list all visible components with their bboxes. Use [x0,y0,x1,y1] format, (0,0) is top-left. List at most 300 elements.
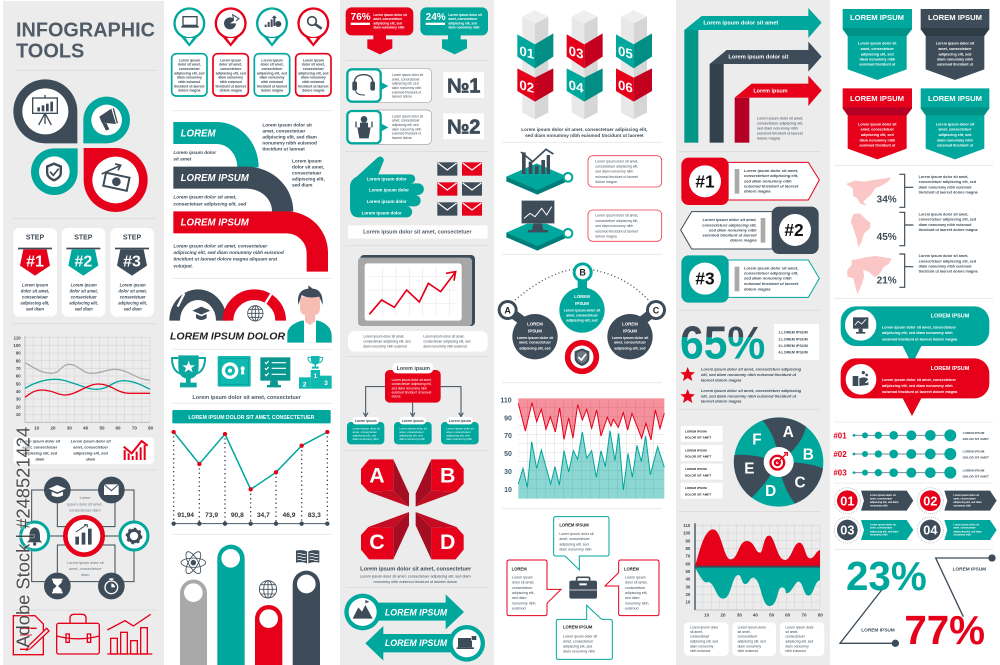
ribbon text blocks: Lorem ipsum dolor sit [262,123,312,129]
map stat: 45 percent: diam nonummy nibh euismod [919,223,972,227]
text box 1: dolore magna [178,89,201,93]
step 3 card [110,228,154,317]
wheel labels: LOREM IPSUM [685,486,707,490]
step 1 card: dolor sit amet, [21,289,49,294]
panel: chart notes: diam nonummy [738,644,761,648]
bubble: bottom: Lorem ipsum dolor sit [563,634,597,638]
card: speaker: Lorem ipsum dolor sit [392,114,423,118]
bubble: bottom: LOREM IPSUM [563,625,593,630]
flow: red box [385,363,441,403]
pin: pie chart [215,7,247,47]
bubble: left: euismod [512,606,526,610]
ribbon text blocks: volutpat. [173,263,193,269]
arrow: dark bent: Lorem ipsum dolor sit [728,55,788,61]
ribbon: teal [173,122,259,167]
panel: column 5 background [676,0,830,665]
big stat: 23 percent with leader: 23% [846,553,927,599]
panel: chart caption: adipiscing elit, sed [23,452,58,456]
title: TOOLS [16,40,84,62]
callout: 24 percent: 24% [426,12,446,23]
line chart: three curves: 50 [99,425,105,430]
speech panel: red [841,358,989,416]
arrow: teal bent: Lorem ipsum dolor sit amet [703,21,778,27]
flow: teal boxes: diam nonummy nibh [353,437,379,441]
icon: trophy [172,355,205,387]
text box 4: dolor sit amet, [302,63,325,67]
bubble: left: sed diam [512,596,527,600]
panel: four map pins [173,7,329,47]
pillars caption: Lorem ipsum dolor sit amet, consectetuer adipiscing elit, [521,127,647,132]
chart: mirrored area [683,523,823,618]
text box 3 [254,54,290,96]
list: lorem ipsum items: 1.LOREM IPSUM [778,330,808,334]
card: speaker: laoreet dolore [392,136,412,140]
ribbon text blocks: adipiscing elit, [292,177,325,183]
numbered arrow: 01: 01 [840,494,854,508]
bubble: right: dolor sit amet, [625,581,647,585]
line chart: three curves: 90 [16,351,21,356]
icon: podium [299,356,332,389]
step 1 card: consectetuer [22,295,48,300]
text box 3: nibh euismod [261,80,283,84]
ribbon text blocks: nonummy nibh euismod [262,141,317,147]
icon: presentation board [13,79,77,143]
icon: teal hand with text [350,157,424,217]
bubble: right: nonummy nibh [625,601,648,605]
speech panel: teal: LOREM IPSUM [931,314,970,320]
panel: chart notes: nibh euismod [738,649,758,653]
icon: megaphone [83,97,130,143]
text box 4: nibh euismod [302,80,324,84]
star note 2: Lorem ipsum dolor sit amet, consectetuer adipiscing [701,388,802,393]
icon: teal hand with text: Lorem ipsum dolor [362,211,402,216]
icon: shield [31,148,78,195]
text band under tablet: consectetuer adipiscing elit, sed [363,339,411,343]
chart: red and teal area: 10 [504,487,512,494]
dot row: 03: LOREM IPSUM [963,468,985,472]
star note 1 [680,367,802,382]
chart: mirrored area: 60 [686,561,691,566]
icon: teal hand with text: Lorem ipsum dolor [367,176,407,181]
map stat: 34 percent: consectetuer adipiscing elit, sed [919,180,977,184]
numbered arrow: 02: nonummy nibh [953,504,971,507]
map stat: 21 percent: tincidunt ut laoreet dolore magna [919,270,978,274]
node A: A [504,305,511,315]
icon: safe [218,356,251,387]
card: speaker: euismod tincidunt ut [392,132,421,136]
node B: LOREM [574,294,590,299]
diagram: speech bubbles around briefcase [507,517,659,659]
node: stopwatch [98,573,125,599]
icon: globe [248,306,263,321]
bar: red [255,605,282,665]
node A: IPSUM [528,329,542,334]
dot row: 01: #01 [833,431,847,440]
diagram: A B C D blocks [361,459,464,559]
network text: ipsum dolor sit amet, [67,502,103,506]
chart: dotted line with values [171,430,329,526]
text box 3: consectetuer [261,67,283,71]
node C [607,300,666,359]
bubble: left: adipiscing elit, [512,591,534,595]
bubble: left: consectetuer [512,586,533,590]
banner: red left [843,88,912,159]
text box 1: nibh euismod [178,80,200,84]
line chart: three curves: 100 [13,343,21,348]
banner: line chart title [172,410,331,423]
node C: IPSUM [623,329,637,334]
tag: number 2: #2 [784,220,804,240]
banner: teal left: amet, consectetuer [861,47,895,51]
bubble: right: adipiscing elit, [625,591,647,595]
callout: 76 percent [346,7,413,54]
chart: mirrored area: 60 [785,613,791,618]
bubble: right: consectetuer [625,586,646,590]
node C: Lorem ipsum dolor sit [612,336,649,340]
text box 3: dolore magna [261,89,283,93]
icon group: envelopes [437,162,482,216]
flow: red box: dolore [392,395,401,399]
flow: teal boxes: Lorem ipsum dolor sit [353,427,380,431]
text box: monitor platform [588,210,662,241]
panel: chart caption [13,437,154,464]
numbered arrow: 02: Lorem ipsum dolor sit [953,494,979,497]
text box 4 [296,54,331,96]
banner: dark right [921,9,989,80]
bubble: left [507,560,561,616]
card: speaker: diam nonummy nibh [392,127,421,131]
banner: teal right: amet, consectetuer [938,128,972,132]
text box: chart platform [588,156,662,187]
ribbon labels: LOREM IPSUM [181,173,250,184]
network text [67,496,105,577]
chart: mirrored area: 10 [704,613,710,618]
step 3 card: consectetuer [120,295,146,300]
text band under tablet: diam nonummy nibh euismod [363,344,407,348]
bubble: left: nonummy nibh [512,601,535,605]
line chart: three curves: 30 [16,397,21,402]
numbered arrow: 03: 03 [840,524,854,538]
icon: graduation cap [192,307,210,320]
arrow: red bent: Lorem ipsum [753,89,788,95]
ribbon text blocks: tincidunt ut laoreet dolore magna aliquam erat [173,257,278,263]
text box 1: Lorem ipsum [179,58,200,62]
line chart: three curves: 50 [16,381,21,386]
text band under tablet: Lorem ipsum dolor sit amet, [423,334,464,338]
platform: monitor on isometric base [506,201,572,251]
text box 3: tincidunt ut laoreet [257,84,288,88]
wheel labels: LOREM IPSUM [685,429,707,433]
banner: red left: euismod tincidunt ut [859,143,896,147]
callout: 76 percent: 76% [351,12,371,23]
bubble: top: LOREM IPSUM [559,523,589,528]
map stat: 21 percent: consectetuer adipiscing elit, sed [919,259,977,263]
bubble: bottom: amet, consectetuer [563,639,594,643]
wheel labels: LOREM IPSUM [685,448,707,452]
card: headset: euismod tincidunt ut [392,90,421,94]
text band under tablet: consectetuer adipiscing elit, sed [423,339,471,343]
numbered arrow: 03: Lorem ipsum dolor sit [870,523,896,526]
flow: red box: Lorem ipsum [397,366,430,372]
numbered arrow: 01 [834,488,913,514]
step 1 card: STEP [26,234,44,241]
tag: number 3: dolore magna [744,286,771,291]
icon: red briefcase [57,614,99,654]
panel: four petal icons [13,79,148,212]
chart: mirrored area: 30 [686,584,691,589]
chart: mirrored area: 80 [686,546,691,551]
chart: mirrored area: 80 [818,613,823,618]
panel: chart notes: adipiscing elit, sed [738,640,766,644]
network text: Lorem [80,496,90,500]
tag: number 3: sed diam nonummy nibh [744,276,792,281]
dot row: 02: #02 [833,450,847,459]
step 2 card: consectetuer [71,295,97,300]
icon: teal hand with text: Lorem ipsum dolor [367,199,407,204]
flow: red box: Lorem ipsum dolor sit amet, [392,378,432,382]
speech panel: red: euismod tincidunt ut laoreet dolore magna [882,390,958,394]
icon caption: Lorem ipsum dolor sit amet, consectetuer [192,395,302,401]
ribbon text blocks: amet, consectetuer [262,129,306,135]
chart: swirl wheel A-F: E [744,461,754,478]
numbered arrow: 04: 04 [923,524,937,538]
band: hand caption: Lorem ipsum dolor sit amet, consectetuer [363,230,472,236]
panel: chart notes: diam nonummy [690,644,714,648]
diagram: A B C circles [498,262,666,371]
ribbon labels: LOREM IPSUM [181,218,250,229]
blocks caption: Lorem ipsum dolor sit amet, consectetuer adipiscing elit, sed diam [360,575,471,579]
panel: chart notes: Lorem ipsum dolor [785,625,815,629]
icon: book [296,550,319,563]
bubble: top: diam nonummy nibh [559,547,592,551]
wheel labels: LOREM IPSUM [685,467,707,471]
chart: mirrored area: 20 [686,592,691,597]
bubble: top: Lorem ipsum dolor sit [559,532,594,536]
bubble: bottom: diam nonummy nibh [563,650,595,654]
bar: dark [293,571,320,665]
ribbon text blocks [173,123,325,269]
panel: chart caption: amet, consectetuer [23,446,58,450]
text band under tablet: diam nonummy nibh euismod [423,344,467,348]
ribbon text blocks: tincidunt ut laoreet [262,147,305,153]
pin: magnifier [297,7,329,47]
ribbon text blocks: Lorem ipsum dolor sit amet, [173,195,237,201]
tag: number 2: consectetuer adipiscing elit, [702,222,757,227]
tag: number 3: euismod tincidunt ut laoreet [744,281,799,286]
numbered arrow: 01: amet, consectetuer [870,497,892,500]
heading: lorem ipsum dolor: LOREM IPSUM DOLOR [170,330,285,342]
pin: laptop [173,7,205,47]
chart: mirrored area: 30 [737,613,742,618]
text box 1 [172,54,207,96]
flow: teal boxes: Lorem ipsum dolor sit [446,427,474,431]
tag: number 3: #3 [695,269,715,289]
text box: monitor platform: sed diam nonummy nibh [595,224,633,228]
wheel labels: DOLOR SIT AMET [685,492,711,496]
title [16,20,155,62]
banner: dark right: adipiscing elit, sed [939,52,971,56]
line chart: three curves: 10 [34,425,40,430]
line chart: three curves: 30 [67,425,72,430]
step 2 card: STEP [74,234,93,241]
band: hand caption [348,225,488,239]
panel: chart notes [684,622,824,656]
line chart: three curves: 40 [83,425,89,430]
panel: chart notes: nibh euismod [785,649,806,653]
map stat: 21 percent: diam nonummy nibh euismod [919,264,972,268]
text box 2: diam nonummy [218,76,243,80]
icon: podium: 1 [313,373,317,380]
chart: dotted line with values: 91,94 [177,512,194,519]
banner: teal left: euismod tincidunt ut [859,63,896,67]
text box 2: dolore magna [220,89,242,93]
chart: red and teal area: 90 [504,415,512,422]
bubble: left: LOREM [512,567,527,572]
panel: chart notes: nibh euismod [690,649,710,653]
map stat: 45 percent: Lorem ipsum dolor sit amet, [919,213,968,217]
panel: chart caption: diam [86,458,96,462]
tag: number 1: sed diam nonummy nibh [744,178,792,183]
banner: teal left: diam nonummy nibh [859,58,895,62]
banner: teal right: LOREM IPSUM [928,94,982,103]
line chart: three curves: 110 [14,335,21,340]
pillars: 05 and 06: 05 [618,43,633,62]
chart: dotted line with values: 90,8 [231,512,244,519]
step 3 card: sed diam [124,307,142,312]
node A: LOREM [527,322,543,327]
block C: C [369,530,385,554]
map stat: 34 percent [846,174,978,207]
bar: teal [217,545,245,665]
node B: Lorem ipsum dolor sit [564,308,601,312]
line chart: three curves: 80 [148,425,154,430]
text: arrows note: euismod tincidunt ut laoreet [757,131,804,135]
text box 1: adipiscing elit, sed [174,71,204,75]
icon: red growth chart [107,614,152,654]
node: hourglass [44,573,71,599]
step 2 card: sed diam [75,307,93,312]
wheel labels: DOLOR SIT AMET [685,473,711,477]
step 2 card [62,228,105,317]
dot row: 03 [833,467,989,479]
arrow: teal bent [684,8,822,143]
chart: mirrored area: 70 [686,554,691,559]
panel: column 3 background [340,0,494,665]
step 3 card: STEP [123,234,141,241]
callout: 24 percent: diam nonummy nibh [448,26,480,30]
chart: red and teal area: 110 [500,397,512,404]
icon: atom [181,550,206,576]
text box: chart platform: Lorem ipsum dolor sit amet, [595,159,638,163]
node B: B [579,268,586,278]
banner: teal left: adipiscing elit, sed [861,52,894,56]
speech panel: red: LOREM IPSUM [931,366,970,372]
text box 2: adipiscing elit, sed [216,71,246,75]
chart: mirrored area: 20 [720,613,726,618]
map stat: 45 percent: consectetuer adipiscing elit, sed [919,218,977,222]
numbered arrow: 04: amet, consectetuer [953,527,976,530]
bubble: top [554,517,609,570]
arrow: right with mountain: LOREM IPSUM [385,607,448,617]
numbered arrow: 01: nonummy nibh [870,504,888,507]
flow: teal boxes: Lorem ipsum [449,419,471,423]
ribbon text blocks: Lorem ipsum [292,159,322,165]
numbered arrow: 03 [834,517,913,543]
bubble: right: LOREM [624,567,640,572]
bubble: left: Lorem ipsum [512,576,533,580]
ribbon text blocks: consectetuer [292,171,322,177]
ribbon text blocks: Lorem ipsum dolor sit amet, consectetuer [173,243,268,249]
bubble: bottom: adipiscing elit, sed [563,645,592,649]
tag: number 2: sed diam nonummy nibh [709,227,757,232]
banner: teal right: euismod tincidunt ut [937,143,974,147]
tag: number 1: #1 [695,171,715,191]
chart: swirl wheel A-F: A [783,424,794,441]
star note 1: Lorem ipsum dolor sit amet, consectetuer adipiscing [701,367,802,372]
speech panel: red: Lorem ipsum dolor sit amet, consectetuer [882,378,957,382]
panel: chart caption: amet, consectetuer [73,446,109,450]
card: speaker: amet, consectetuer [392,119,421,123]
flow: teal boxes: amet, consectetuer [446,430,471,434]
chart: dotted line with values: 46,9 [283,512,296,519]
text box 3: dolor sit amet, [260,63,284,67]
bubble: right: Lorem ipsum [625,576,646,580]
pillars: 05 and 06: 06 [618,77,633,96]
chart: mirrored area: 70 [801,613,807,618]
text box: monitor platform: dolore magna [595,234,617,238]
ribbon text blocks: adipiscing elit, sed diam nonummy nibh euismod [173,250,284,256]
icon: podium: 3 [324,380,328,387]
flow: teal boxes: Lorem ipsum [402,419,424,423]
text box: monitor platform: consectetuer adipiscing elit, [595,219,638,223]
panel: chart caption: diam [36,458,45,462]
pillars: 03 and 04: 03 [569,43,584,62]
bubble: top: adipiscing elit, sed [559,542,589,546]
badge: number two [443,113,484,139]
flow: teal boxes: adipiscing elit, sed [446,433,470,437]
node C: amet, consectetuer [614,341,647,345]
chart: swirl wheel A-F: F [752,431,762,448]
text box 4: adipiscing elit, sed [298,71,328,75]
card: headset: laoreet dolore [392,95,412,99]
callout: 24 percent: amet, consectetuer [448,17,478,21]
icon: red ring shield [568,343,596,371]
block B: B [440,464,455,488]
panel: chart notes: sit amet, [785,630,798,634]
banner: teal left: LOREM IPSUM [850,13,904,22]
ribbon: red [173,211,328,272]
text: arrows note: sed diam nonummy nibh [757,126,798,130]
list: lorem ipsum items [774,324,819,360]
flow: teal boxes: diam nonummy nibh [446,437,472,441]
node B: IPSUM [575,301,589,306]
numbered arrow: 02: adipiscing elit, sed diam [953,501,983,504]
pin: growth bars [256,7,288,47]
icon: money with arrow [84,148,148,212]
callout: 24 percent: Lorem ipsum dolor sit [448,13,483,17]
chart: dotted line with values: 83,3 [308,512,321,519]
flow: teal boxes [347,417,479,444]
step 2 card: dolor sit amet, [69,289,98,294]
chart: swirl wheel A-F: D [765,483,776,500]
map stat: 34 percent: 34% [877,195,897,206]
panel: chart notes: Lorem ipsum dolor [738,625,767,629]
tag: number 1: dolore magna [744,189,771,194]
callout: 24 percent [420,7,488,54]
ribbon: dark [173,167,293,212]
callout: 76 percent: diam nonummy nibh [373,26,405,30]
bubble: top: amet, consectetuer [559,537,591,541]
